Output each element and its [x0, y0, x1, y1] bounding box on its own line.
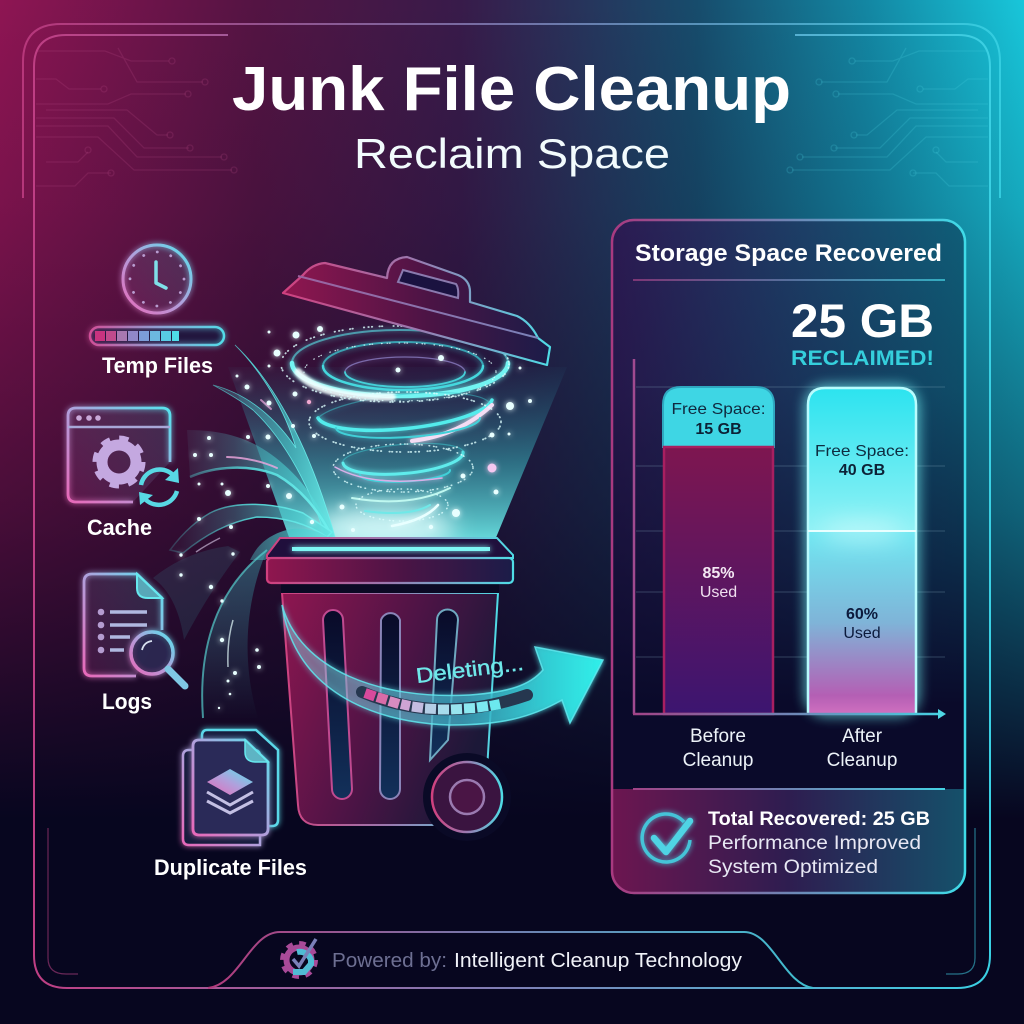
bar: before cleanup: 85%: [702, 565, 735, 582]
bar: after cleanup: 60%: [846, 606, 878, 623]
item: cache: [68, 408, 179, 540]
icon: sync arrows: [139, 468, 179, 505]
icon: document: [84, 574, 162, 676]
icon: layers: [207, 769, 253, 813]
bar: after cleanup: Used: [843, 625, 881, 642]
bar: after cleanup: Free Space:: [815, 443, 909, 460]
bar: before cleanup: 15 GB: [695, 421, 742, 438]
icon: trash lid: [283, 257, 550, 365]
bin opening: [267, 538, 513, 558]
bin body: [282, 593, 498, 825]
icon: trash bin: [267, 538, 513, 841]
icon: clock: [123, 245, 191, 313]
icon: magnifier: [131, 632, 185, 686]
summary band: System Optimized: [708, 857, 878, 878]
bar: before cleanup: Free Space:: [672, 401, 766, 418]
icon: front document: [193, 740, 268, 835]
bar: before cleanup: Used: [700, 584, 737, 601]
item: temp files: [90, 245, 224, 378]
bar: after cleanup: 40 GB: [839, 462, 885, 479]
circuit pattern right: [787, 48, 988, 186]
data streams into the bin: [153, 345, 335, 718]
summary text: Total Recovered: 25 GB: [708, 809, 930, 830]
tornado particle cloud: [281, 326, 509, 521]
panel: storage space recovered: [612, 220, 965, 893]
panel heading: Storage Space Recovered: [635, 240, 942, 267]
summary band: Performance Improved: [708, 833, 921, 854]
deleting label: Deleting...: [415, 652, 525, 688]
panel background: [612, 220, 965, 893]
bar: after cleanup: [807, 387, 917, 714]
footer label: Powered by:: [332, 950, 447, 972]
subtitle: Reclaim Space: [354, 130, 670, 177]
tornado highlight: [298, 372, 392, 397]
label: Temp Files: [102, 353, 213, 378]
light beam: [228, 367, 567, 550]
progress bar: [90, 327, 224, 345]
x axis arrow: [633, 709, 946, 719]
icon: browser window: [68, 408, 170, 502]
icon: tornado: [281, 326, 509, 526]
bar labels: Before: [690, 726, 746, 747]
footer: [282, 939, 742, 977]
item: logs: [84, 574, 185, 714]
bar chart: [633, 359, 946, 771]
label: Logs: [102, 689, 152, 714]
bar labels: Cleanup: [683, 750, 753, 771]
summary band: [613, 789, 964, 892]
tornado glow rings: [292, 330, 508, 526]
icon: back documents: [183, 730, 278, 845]
bin slots: [323, 610, 458, 799]
bar labels: [683, 726, 897, 771]
icon: gear check: [282, 939, 316, 977]
label: Duplicate Files: [154, 855, 307, 880]
bin shadow: [281, 582, 499, 593]
title: Junk File Cleanup: [232, 55, 791, 124]
footer technology name: Intelligent Cleanup Technology: [454, 950, 742, 972]
circuit pattern left: [36, 48, 237, 186]
label: Cache: [87, 515, 152, 540]
bin glow slit: [292, 547, 490, 551]
item: duplicate files: [154, 730, 307, 880]
wheel: [423, 753, 511, 841]
deleting progress bar: [362, 692, 527, 710]
arrow: deleting swoosh: [282, 605, 603, 725]
bin rim: [267, 558, 513, 583]
particles: [179, 326, 532, 709]
big number: 25 GB: [791, 294, 934, 347]
icon: gear: [96, 438, 142, 486]
panel border: [612, 220, 965, 893]
y axis: [633, 359, 635, 714]
bar labels: After: [842, 726, 883, 747]
icon: check circle: [642, 814, 690, 862]
bar labels: Cleanup: [827, 750, 897, 771]
arrow shape: [282, 605, 603, 725]
bar: before cleanup: [663, 387, 774, 714]
reclaimed label: RECLAIMED!: [791, 347, 934, 370]
